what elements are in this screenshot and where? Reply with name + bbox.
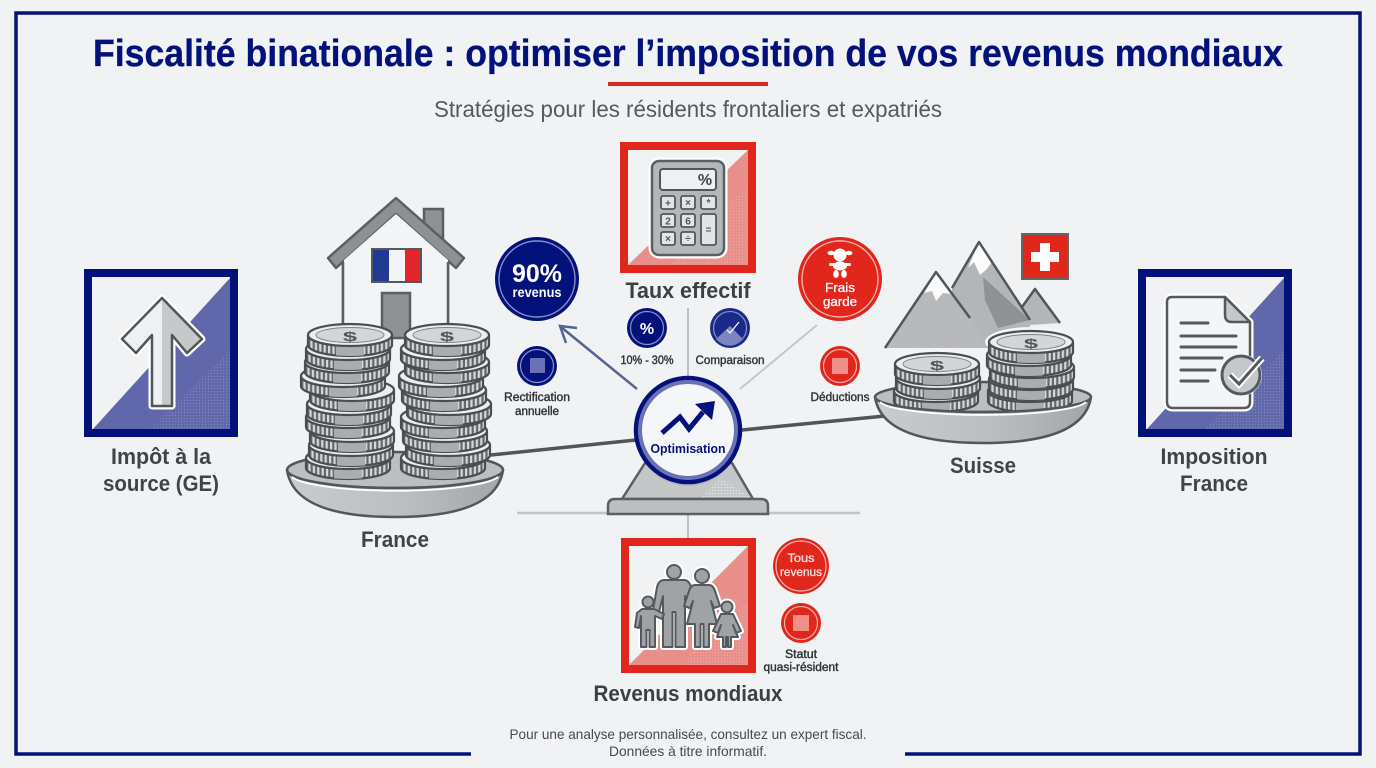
- icon box: up arrow: [88, 273, 234, 433]
- icon: coin stack left: $: [343, 330, 357, 344]
- panel: Suisse side of scale: [875, 234, 1091, 478]
- icon: coin stack tall: $: [1024, 337, 1038, 351]
- badge: rectification annuelle: Rectification: [504, 392, 570, 404]
- footer note: [510, 726, 866, 759]
- badge: tous revenus: revenus: [780, 567, 822, 579]
- badge: comparaison: Comparaison: [696, 355, 764, 367]
- panel: right France tax: [1142, 273, 1288, 496]
- badge: tous revenus: [773, 538, 829, 594]
- label: [1160, 444, 1268, 496]
- icon: coin stack right: [399, 324, 491, 479]
- central optimisation medallion: [636, 378, 740, 486]
- badge: statut quasi-résident: quasi-résident: [764, 662, 839, 674]
- icon box: calculator: ×: [685, 198, 691, 209]
- badge: 90% revenus: [495, 237, 579, 321]
- icon: growth arrow: [662, 401, 715, 433]
- central optimisation medallion: Optimisation: [650, 442, 726, 456]
- footer note: Pour une analyse personnalisée, consultez un expert fiscal.: [510, 726, 866, 742]
- badge: tous revenus: Tous: [788, 553, 815, 565]
- scale base: [608, 463, 768, 514]
- subtitle: Stratégies pour les résidents frontaliers et expatriés: [434, 96, 942, 122]
- icon box: calculator: 2: [665, 216, 671, 228]
- panel: left tax at source: [88, 273, 234, 496]
- icon: baby: [828, 248, 852, 278]
- icon: coin stack small: $: [930, 359, 944, 373]
- title: Fiscalité binationale : optimiser l’imposition de vos revenus mondiaux: [93, 33, 1283, 75]
- heading: Taux effectif: [626, 278, 751, 303]
- icon: coin stack tall: [985, 327, 1077, 412]
- label: France: [361, 527, 429, 552]
- icon: dish Suisse front: [875, 397, 1091, 443]
- icon: house with flag: [328, 198, 464, 338]
- badge: statut quasi-résident: [764, 603, 839, 674]
- badge: frais garde: garde: [823, 294, 857, 309]
- label: France: [1180, 471, 1248, 496]
- title underline: [608, 82, 768, 86]
- icon box: calculator: ×: [665, 234, 671, 245]
- panel: taux effectif: [620, 146, 764, 367]
- badge: frais garde: Frais: [825, 280, 856, 295]
- badge: déductions: Déductions: [810, 392, 870, 404]
- badge: 10% - 30%: %: [640, 321, 654, 338]
- badge: 90% revenus: revenus: [512, 285, 562, 300]
- icon box: calculator: [624, 146, 752, 269]
- panel: revenus mondiaux: [594, 538, 839, 706]
- arrow to 90% revenus: [560, 326, 637, 389]
- icon: coin stack right: $: [440, 330, 454, 344]
- icon box: calculator: 6: [685, 216, 691, 228]
- icon box: calculator: =: [706, 225, 712, 236]
- label: Impôt à la: [111, 444, 212, 469]
- label: Imposition: [1160, 444, 1268, 469]
- icon: dish France back: [287, 452, 503, 488]
- badge: 10% - 30%: 10% - 30%: [620, 355, 674, 367]
- badge: statut quasi-résident: Statut: [785, 649, 818, 661]
- label: [103, 444, 219, 496]
- badge: comparaison: [696, 308, 764, 367]
- icon box: document: [1142, 273, 1288, 433]
- label: source (GE): [103, 471, 219, 496]
- badge: 10% - 30%: [620, 308, 674, 367]
- heading: Revenus mondiaux: [594, 681, 783, 706]
- badge: frais garde: [798, 237, 882, 321]
- icon: dish Suisse back: [875, 382, 1091, 412]
- badge: rectification annuelle: [504, 346, 570, 418]
- icon box: family: [625, 542, 752, 669]
- icon: coin stack left: [301, 324, 394, 479]
- icon box: calculator: +: [665, 198, 671, 210]
- badge: déductions: [810, 346, 870, 404]
- badge: rectification annuelle: annuelle: [515, 406, 559, 418]
- icon box: calculator: ÷: [685, 234, 691, 245]
- icon: mountains: [885, 242, 1060, 348]
- icon: dish France front: [287, 470, 503, 517]
- icon box: calculator: *: [707, 198, 711, 209]
- panel: France side of scale: [287, 198, 503, 552]
- scale beam: [491, 416, 885, 455]
- icon: French flag: [372, 249, 421, 282]
- icon box: calculator: %: [698, 172, 712, 189]
- badge: 90% revenus: 90%: [512, 260, 562, 288]
- label: Suisse: [950, 453, 1016, 478]
- footer note: Données à titre informatif.: [609, 743, 767, 759]
- icon: Swiss flag: [1022, 234, 1068, 279]
- connector lines: [517, 308, 860, 538]
- icon: coin stack small: [891, 349, 983, 412]
